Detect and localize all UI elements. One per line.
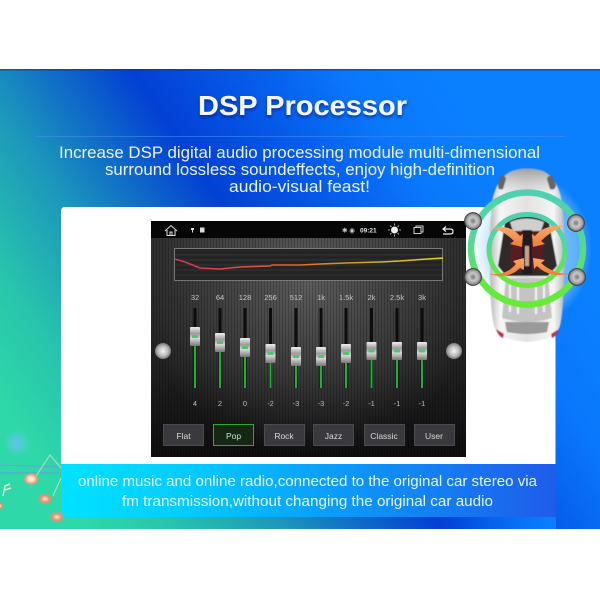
preset buttons: User — [425, 431, 443, 441]
icon: home — [165, 226, 177, 236]
right knob — [446, 343, 462, 359]
preset buttons — [164, 424, 454, 446]
slider values: -1 — [368, 399, 375, 408]
white content panel — [61, 207, 556, 464]
left knob — [155, 343, 171, 359]
speakers — [464, 212, 586, 286]
slider values: -2 — [267, 399, 274, 408]
preset buttons: Flat — [176, 431, 191, 441]
description text — [59, 144, 540, 196]
sound rings — [471, 192, 583, 304]
description text: surround lossless soundeffects, enjoy high-definition — [105, 161, 495, 179]
preset buttons: Pop — [226, 431, 241, 441]
equalizer response graph — [174, 248, 443, 280]
frequency labels: 256 — [264, 293, 277, 302]
slider values: 0 — [243, 399, 247, 408]
slider values: 2 — [218, 399, 222, 408]
frequency labels: 512 — [290, 293, 302, 302]
car body — [490, 168, 564, 342]
slider values — [193, 399, 425, 408]
description text: audio-visual feast! — [229, 178, 370, 196]
slider values: -1 — [419, 399, 425, 408]
frequency labels — [191, 293, 426, 302]
divider line — [35, 136, 565, 137]
frequency labels: 64 — [216, 293, 224, 302]
slider levels — [194, 340, 423, 388]
description text: Increase DSP digital audio processing module multi-dimensional — [59, 144, 540, 162]
status bar — [151, 221, 466, 238]
cyan caption bar — [61, 464, 556, 517]
slider values: -3 — [293, 399, 299, 408]
caption text: online music and online radio,connected to the original car stereo via — [78, 474, 538, 490]
status icons right: ✱ ◉ — [342, 226, 355, 234]
arrows — [489, 226, 568, 276]
frequency labels: 2.5k — [390, 293, 404, 302]
car stereo screen — [151, 221, 466, 457]
glow — [472, 176, 592, 324]
caption text — [78, 474, 538, 510]
title: DSP Processor — [198, 90, 407, 121]
preset buttons: Classic — [370, 431, 398, 441]
slider values: -1 — [394, 399, 400, 408]
preset buttons: Rock — [274, 431, 294, 441]
slider values: 4 — [193, 399, 197, 408]
slider values: -3 — [318, 399, 324, 408]
frequency labels: 2k — [368, 293, 376, 302]
frequency labels: 1.5k — [339, 293, 353, 302]
slider tracks — [194, 308, 424, 388]
status icons left — [191, 228, 204, 232]
frequency labels: 3k — [418, 293, 426, 302]
frequency labels: 32 — [191, 293, 199, 302]
music notes decoration — [0, 430, 65, 523]
preset buttons: Jazz — [325, 431, 342, 441]
slider handles — [190, 327, 427, 366]
frequency labels: 1k — [317, 293, 325, 302]
icon: back — [443, 226, 453, 234]
caption text: fm transmission,without changing the original car audio — [122, 494, 493, 510]
slider values: -2 — [343, 399, 349, 408]
icon: brightness — [388, 224, 401, 236]
car with surround sound illustration — [464, 168, 592, 342]
blue gradient background band — [0, 69, 600, 529]
icon: recent windows — [414, 226, 423, 234]
clock: 09:21 — [360, 228, 377, 234]
frequency labels: 128 — [239, 293, 251, 302]
